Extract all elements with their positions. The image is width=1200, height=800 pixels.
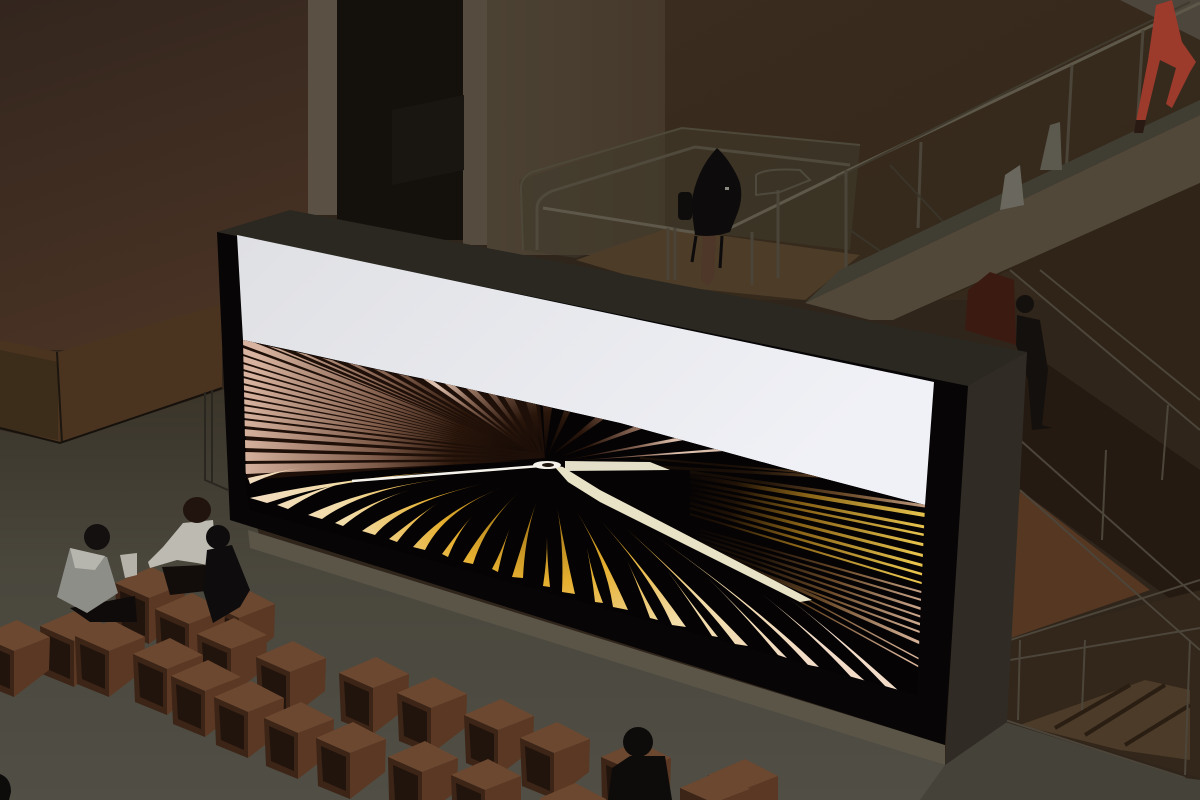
display box top — [217, 210, 1027, 387]
clock second hand — [352, 466, 540, 481]
clock minute hand — [553, 465, 812, 602]
clock centre hub — [533, 461, 561, 469]
lower right wall and stairs — [893, 183, 1200, 800]
seated group of three people — [57, 497, 250, 623]
display black frame — [217, 232, 968, 745]
shopping bag — [120, 553, 137, 578]
bottom fan rays — [248, 468, 900, 692]
screen sky — [237, 235, 934, 505]
clock artwork — [243, 340, 925, 690]
woman at railing with phone — [678, 148, 741, 286]
upper landing floor and glass balustrade — [519, 2, 1200, 300]
top fan rays — [422, 378, 724, 461]
screen — [235, 235, 935, 710]
left glass ledge — [0, 304, 228, 490]
person in dark top — [203, 525, 250, 623]
display plinth — [248, 530, 945, 765]
woman in white shirt — [148, 497, 217, 595]
person on upper stairs in orange — [1134, 0, 1196, 133]
floor — [0, 388, 1200, 800]
person seated in foreground — [608, 727, 672, 800]
person in white hoodie — [57, 524, 137, 622]
left fan rays — [243, 338, 530, 474]
wooden cube stools — [0, 567, 778, 800]
staircase underside band — [805, 100, 1200, 320]
clock hour hand — [565, 461, 670, 471]
foreground head at corner — [0, 774, 11, 800]
right fan rays — [690, 476, 925, 584]
people on the stairs below — [965, 272, 1052, 430]
display box right side — [945, 352, 1027, 765]
